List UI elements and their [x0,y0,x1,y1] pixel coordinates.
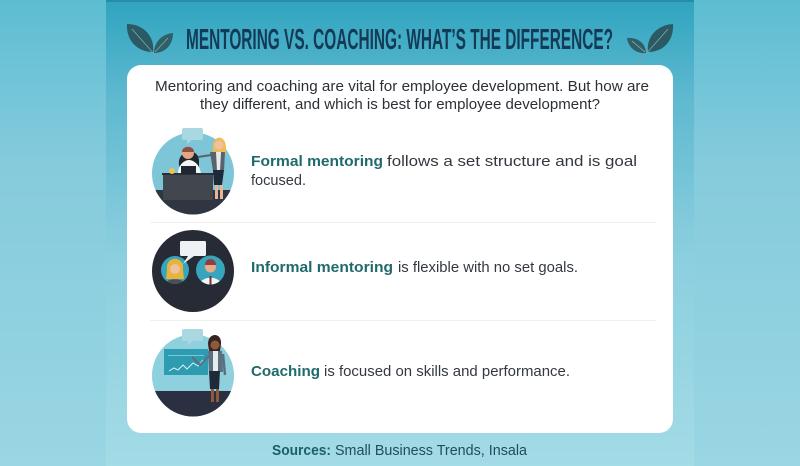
panel: white card [127,65,673,433]
text: formal mentoring [251,153,637,189]
sources: Sources: [272,442,331,459]
centre column [106,0,694,466]
text: formal mentoring: follows a set structure and is goal [387,153,637,170]
text: formal mentoring: focused. [251,172,306,189]
text: coaching: is focused on skills and performance. [324,363,570,380]
icon: left leaves [127,24,173,63]
text: formal mentoring: Formal mentoring [251,153,383,170]
icon: coaching illustration [150,329,236,417]
divider [150,320,656,321]
text: coaching: Coaching [251,363,320,380]
intro text [155,78,649,113]
intro text: Mentoring and coaching are vital for employee development. But how are [155,78,649,95]
text: informal mentoring [251,259,578,276]
icon: informal mentoring illustration [152,230,234,312]
coach [192,335,225,402]
woman standing [198,138,226,199]
sources: Small Business Trends, Insala [335,442,528,459]
icon: formal mentoring illustration [150,128,236,216]
text: informal mentoring: Informal mentoring [251,259,393,276]
divider [150,222,656,223]
intro text: they different, and which is best for employee development? [200,96,600,113]
text: informal mentoring: is flexible with no set goals. [398,259,578,276]
icon: right leaves [627,24,673,63]
